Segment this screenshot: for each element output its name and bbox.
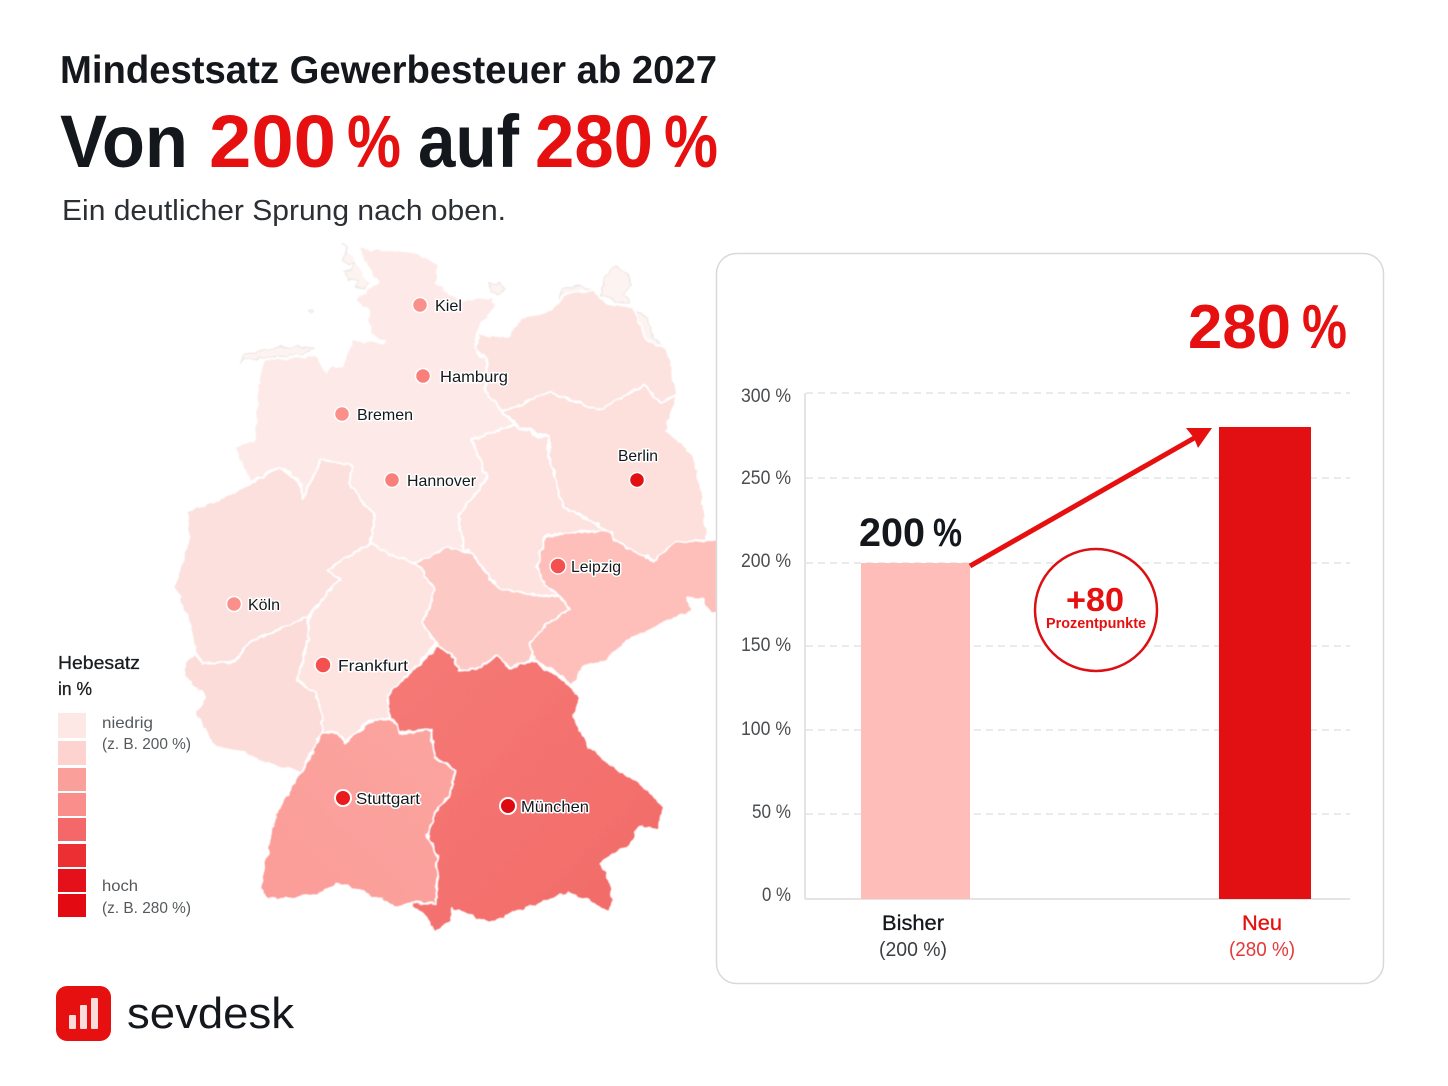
legend colour scale — [58, 713, 86, 917]
subtitle: Ein deutlicher Sprung nach oben. — [62, 195, 506, 227]
legend heading: Hebesatz — [58, 652, 140, 673]
x label: Neu: Neu — [1242, 912, 1282, 935]
y-axis labels: 300 % — [741, 386, 791, 407]
legend label: niedrig: niedrig — [102, 715, 153, 732]
region: Schleswig-Holstein and Niedersachsen — [233, 247, 514, 563]
city: Berlin: Berlin — [618, 448, 658, 465]
region: Thueringen — [416, 547, 570, 677]
region: Baden-Wuerttemberg — [260, 717, 456, 908]
city: Bremen — [334, 406, 413, 424]
y-axis labels — [741, 386, 791, 906]
bar: Bisher 200 % — [861, 563, 970, 899]
value label 200 %: 200 — [859, 511, 925, 555]
region: Sachsen-Anhalt — [458, 425, 609, 597]
region: Rheinland-Pfalz und Saarland — [184, 617, 322, 773]
x label: Neu: (280 %) — [1229, 939, 1295, 961]
big value 280 %: % — [1302, 293, 1347, 362]
city: Frankfurt: Frankfurt — [338, 658, 409, 675]
legend label: hoch: hoch — [102, 878, 138, 895]
headline: 200 — [209, 100, 336, 183]
x label: Bisher: (200 %) — [879, 939, 947, 961]
islands and coastlines — [240, 242, 661, 362]
headline: % — [664, 100, 718, 183]
big value 280 % — [1188, 293, 1347, 362]
y-axis labels: 200 % — [741, 551, 791, 572]
city: Frankfurt — [315, 657, 409, 675]
city: Hamburg: Hamburg — [440, 369, 508, 386]
y-axis labels: 250 % — [741, 468, 791, 489]
x label: Bisher: Bisher — [882, 912, 944, 935]
y-axis labels: 150 % — [741, 635, 791, 656]
region: Bayern — [387, 645, 664, 933]
callout: +80 Prozentpunkte: Prozentpunkte — [1046, 616, 1146, 632]
title: Mindestsatz Gewerbesteuer ab 2027 — [60, 49, 717, 92]
value label 200 % — [859, 511, 962, 555]
city: Leipzig — [550, 558, 621, 576]
x label: Neu — [1229, 912, 1295, 961]
legend label: niedrig — [102, 715, 191, 753]
y-axis labels: 50 % — [752, 802, 791, 823]
legend heading — [58, 652, 140, 699]
headline: % — [347, 100, 401, 183]
headline: 280 — [535, 100, 653, 183]
headline: auf — [418, 100, 519, 183]
city: Bremen: Bremen — [357, 407, 413, 424]
grid lines and axes — [805, 393, 1350, 899]
legend label: hoch — [102, 878, 191, 917]
x label: Bisher — [879, 912, 947, 961]
legend — [58, 652, 191, 917]
region: Nordrhein-Westfalen — [175, 460, 375, 663]
logo: sevdesk — [56, 986, 295, 1041]
bar: Neu 280 % — [1219, 427, 1311, 899]
region: Brandenburg — [503, 385, 707, 560]
legend heading: in % — [58, 678, 92, 699]
region: Sachsen — [530, 530, 730, 685]
legend label: niedrig: (z. B. 200 %) — [102, 736, 191, 753]
legend label: hoch: (z. B. 280 %) — [102, 900, 191, 917]
city: Muenchen — [500, 798, 589, 816]
logo wordmark: sevdesk — [127, 989, 295, 1038]
big value 280 %: 280 — [1188, 293, 1291, 362]
city: Berlin — [618, 448, 658, 488]
city: Muenchen: München — [521, 799, 589, 816]
y-axis labels: 0 % — [762, 885, 791, 906]
city: Leipzig: Leipzig — [571, 559, 621, 576]
headline: Von — [60, 100, 188, 183]
map of Germany — [175, 242, 730, 933]
value label 200 %: % — [933, 511, 962, 555]
city: Hannover: Hannover — [407, 473, 477, 490]
y-axis labels: 100 % — [741, 719, 791, 740]
city: Hamburg — [416, 368, 508, 386]
city: Stuttgart: Stuttgart — [356, 791, 421, 808]
city: Kiel — [412, 298, 462, 315]
logo icon — [56, 986, 111, 1041]
region: Hessen — [297, 543, 436, 743]
city: Koeln — [226, 596, 280, 614]
region: Mecklenburg-Vorpommern — [475, 290, 677, 412]
callout: +80 Prozentpunkte — [1035, 549, 1157, 671]
arrow — [970, 428, 1212, 566]
headline — [60, 100, 718, 183]
panel: bar chart card — [716, 254, 1384, 984]
city: Koeln: Köln — [248, 597, 280, 614]
city: Kiel: Kiel — [435, 298, 462, 315]
city: Stuttgart — [335, 790, 421, 808]
callout: +80 Prozentpunkte: +80 — [1066, 581, 1124, 618]
